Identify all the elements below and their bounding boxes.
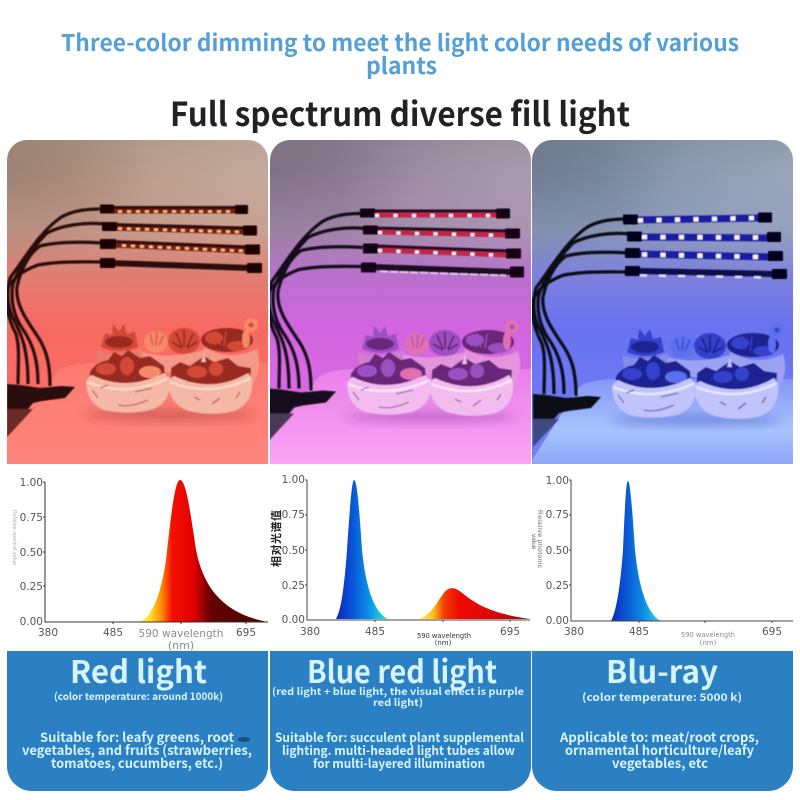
blue spectrum curve	[336, 480, 388, 619]
colour temperature: (color temperature: around 1000k)	[54, 688, 223, 703]
y axis numbers: 0.25	[20, 581, 43, 593]
y axis numbers	[20, 477, 43, 628]
y axis numbers: 0.00	[546, 615, 569, 627]
panel: blue light photo	[532, 140, 793, 464]
panel: red light description	[7, 647, 268, 791]
y axis numbers	[282, 474, 305, 626]
title: three-color dimming: Three-color dimming to meet the light color needs of various	[61, 24, 739, 58]
chart: blue red light spectrum	[268, 474, 530, 647]
suitability text: vegetables, and fruits (strawberries,	[22, 740, 252, 759]
panel: blue red light photo	[270, 140, 531, 464]
heading: blu-ray: Blu-ray	[606, 647, 718, 692]
y axis numbers: 0.50	[20, 547, 43, 559]
blue spectrum curve	[611, 481, 661, 621]
x axis numbers	[300, 626, 520, 638]
icon: succulent pots	[610, 323, 785, 426]
y axis numbers: 1.00	[282, 474, 305, 486]
y axis label: Relative photonic	[536, 510, 543, 569]
y axis numbers: 0.25	[546, 580, 569, 592]
x axis numbers: 485	[365, 626, 385, 638]
x axis title: (nm)	[168, 639, 194, 652]
applicability text: ornamental horticulture/leafy	[565, 740, 755, 759]
suitability text: tomatoes, cucumbers, etc.)	[51, 753, 223, 772]
icon: succulent pots	[345, 320, 520, 423]
y axis numbers: 0.50	[282, 545, 305, 557]
y axis numbers: 1.00	[546, 475, 569, 487]
suitability text: lighting. multi-headed light tubes allow	[282, 740, 515, 759]
title: three-color dimming: plants	[366, 47, 437, 81]
y axis numbers: 0.25	[282, 580, 305, 592]
x axis title: (nm)	[435, 639, 452, 647]
heading: blue red light: Blue red light	[307, 647, 497, 692]
x axis numbers: 485	[103, 627, 123, 639]
suitability text: Suitable for: succulent plant supplemental	[275, 727, 524, 746]
y axis label: 相对光谱值	[268, 510, 284, 567]
y axis numbers: 0.00	[20, 616, 43, 628]
icon: lamp cords and clamp	[267, 214, 365, 442]
panel: blue red light description	[270, 647, 531, 791]
panel: red light photo	[7, 140, 268, 464]
heading: red light: Red light	[70, 647, 207, 692]
icon: blue red lamp bars	[360, 208, 524, 278]
chart: red light spectrum	[11, 477, 268, 652]
x axis numbers: 380	[300, 626, 320, 638]
red spectrum curve	[138, 480, 268, 622]
y axis numbers: 0.75	[282, 509, 305, 521]
x axis numbers	[38, 627, 256, 639]
y axis numbers: 0.75	[546, 509, 569, 521]
panel: blue light description	[532, 647, 793, 791]
colour temperature: (color temperature: 5000 k)	[582, 690, 742, 705]
x axis numbers: 485	[629, 626, 649, 638]
x axis title: 590 wavelength	[417, 632, 471, 640]
y axis numbers: 1.00	[20, 477, 43, 489]
x axis numbers: 695	[236, 627, 256, 639]
x axis title: 590 wavelength	[681, 631, 735, 639]
suitability text: Suitable for: leafy greens, root	[40, 727, 235, 746]
icon: red lamp bars	[100, 204, 262, 273]
x axis numbers: 695	[500, 626, 520, 638]
x axis numbers	[564, 626, 782, 638]
y axis numbers	[546, 475, 569, 627]
y axis numbers: 0.00	[282, 614, 305, 626]
y axis label: value	[530, 534, 537, 550]
applicability text: Applicable to: meat/root crops,	[559, 727, 759, 746]
x axis numbers: 695	[762, 626, 782, 638]
y axis numbers: 0.50	[546, 545, 569, 557]
heading: full spectrum: Full spectrum diverse fill light	[170, 88, 630, 136]
x axis numbers: 380	[38, 627, 58, 639]
x axis title: 590 wavelength	[138, 627, 224, 640]
icon: blue lamp bars	[623, 212, 787, 279]
icon: succulent pots	[84, 318, 259, 421]
x axis numbers: 380	[564, 626, 584, 638]
y axis label: Relative spectral value	[11, 510, 17, 565]
colour description: red light)	[373, 694, 423, 709]
applicability text: vegetables, etc	[612, 753, 708, 772]
suitability text: for multi-layered illumination	[313, 753, 485, 772]
icon: lamp cords and clamp	[6, 209, 104, 437]
y axis numbers: 0.75	[20, 512, 43, 524]
chart: blue light spectrum	[530, 475, 793, 647]
red spectrum bump	[418, 588, 530, 619]
x axis title: (nm)	[700, 639, 717, 647]
colour description: (red light + blue light, the visual effect is purple	[272, 683, 524, 698]
icon: lamp cords and clamp	[532, 219, 630, 447]
